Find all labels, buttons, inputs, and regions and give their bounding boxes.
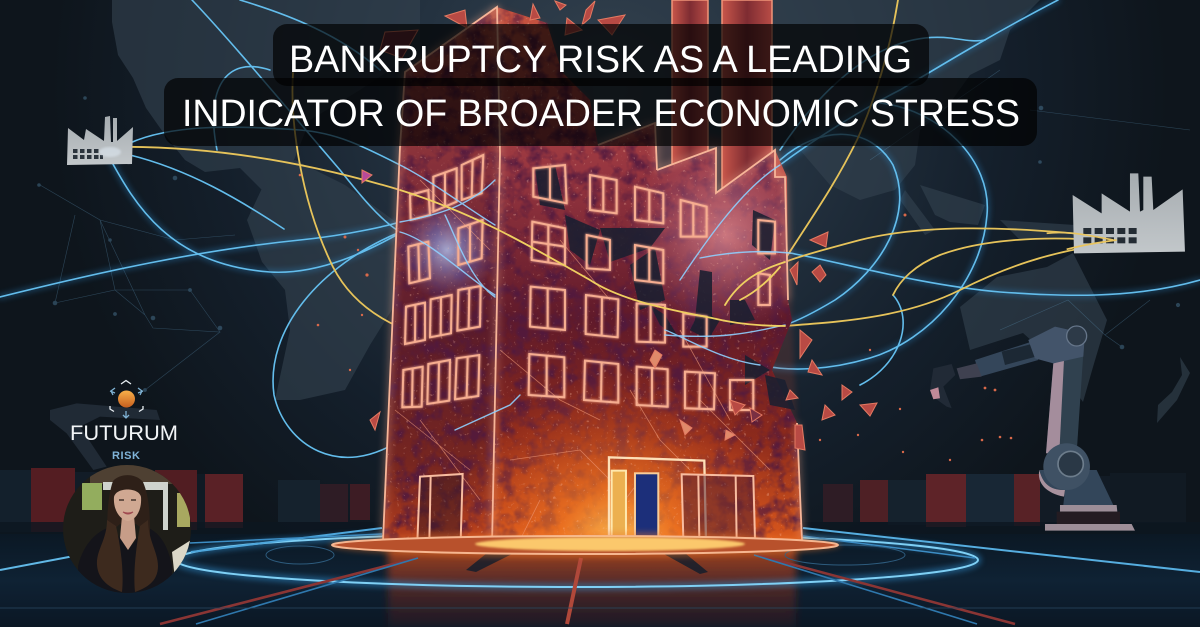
- robot wrist and gripper: [957, 363, 982, 379]
- mouth: [123, 512, 133, 514]
- windows: [402, 155, 775, 410]
- flying debris shards: [362, 1, 877, 450]
- container rail band: [0, 522, 1200, 540]
- eyes: [119, 499, 136, 501]
- map: asia: [760, 0, 1040, 200]
- sharp layer: [0, 0, 1200, 457]
- title background: line 2: [164, 78, 1037, 146]
- shattered dark holes: [535, 165, 795, 410]
- robot base: [1045, 505, 1135, 531]
- right door: [682, 474, 755, 538]
- photo left window: [82, 483, 102, 510]
- photo shelf frame: [103, 482, 168, 530]
- small floor rings: [266, 545, 905, 565]
- building floor reflection: [388, 546, 796, 627]
- building: [329, 0, 841, 558]
- robot upper arm: [975, 342, 1038, 377]
- photo paper: [172, 540, 190, 572]
- map: southeast asia islands: [900, 185, 1075, 240]
- face: [114, 490, 141, 521]
- right wall windows: [533, 165, 707, 237]
- floor shadow blocks: [466, 549, 708, 574]
- glowing base disc: [329, 532, 841, 558]
- perspective lines: [0, 528, 1200, 624]
- right wall: [492, 7, 802, 545]
- robot tower: [1046, 353, 1083, 453]
- center door frame: [609, 457, 706, 540]
- blue overlay lines: [400, 165, 790, 430]
- building outer glow: [383, 7, 802, 541]
- chimneys: [672, 0, 772, 190]
- robot joint: [1043, 443, 1090, 490]
- background shipping containers: left: [0, 468, 370, 532]
- door left panel: [612, 471, 626, 538]
- blue network lines behind building: [0, 0, 1200, 457]
- photo right window: [177, 493, 190, 527]
- robot arm: right: [930, 326, 1135, 531]
- glowing floor ring: [176, 533, 978, 587]
- logo wordmark: FUTURUM: [70, 422, 178, 445]
- map: new zealand: [1157, 357, 1190, 423]
- blue and yellow lines over the building: [400, 165, 790, 430]
- map: north america: [112, 0, 420, 190]
- icon: left factory: [67, 116, 133, 165]
- icon: right factory: [1047, 173, 1185, 253]
- wall texture and glows: [380, 0, 825, 550]
- floor: [0, 534, 1200, 627]
- network constellation: [38, 70, 1190, 392]
- hair locks: [97, 520, 158, 592]
- title background: line 1: [273, 24, 929, 86]
- yellow lines behind building: [105, 0, 1113, 343]
- title: [164, 24, 1037, 146]
- photo backdrop: [63, 472, 191, 574]
- floor lines and rings: [0, 528, 1200, 624]
- left wall: [383, 7, 500, 545]
- title: line 2: INDICATOR OF BROADER ECONOMIC STRESS: [182, 93, 1020, 135]
- hair back: [107, 475, 150, 535]
- wall cracks: [395, 180, 770, 540]
- yellow overlay lines: [400, 190, 785, 326]
- logo: ghost robot arm: [50, 403, 160, 470]
- map: australia: [960, 253, 1107, 402]
- logo: Futurum Risk: [70, 380, 178, 462]
- logo subtitle: RISK: [112, 450, 140, 462]
- logo icon: [110, 380, 143, 418]
- left door: [417, 474, 463, 542]
- door glass: [635, 473, 658, 538]
- glowing ring halo: [176, 533, 978, 587]
- title: line 1: BANKRUPTCY RISK AS A LEADING: [289, 39, 912, 81]
- building back top fragment: [598, 123, 788, 300]
- orange particles: [299, 174, 1012, 461]
- wall edges: [383, 7, 802, 545]
- doors: [417, 457, 755, 542]
- left wall windows: [410, 155, 483, 220]
- portrait photo: [63, 465, 191, 593]
- glow layer: [0, 0, 1200, 369]
- photo ceiling: [90, 465, 175, 484]
- map: south america: [247, 160, 400, 400]
- background shipping containers: right: [823, 473, 1186, 527]
- top: [78, 527, 172, 593]
- neck: [120, 516, 136, 550]
- world map: [112, 0, 1190, 423]
